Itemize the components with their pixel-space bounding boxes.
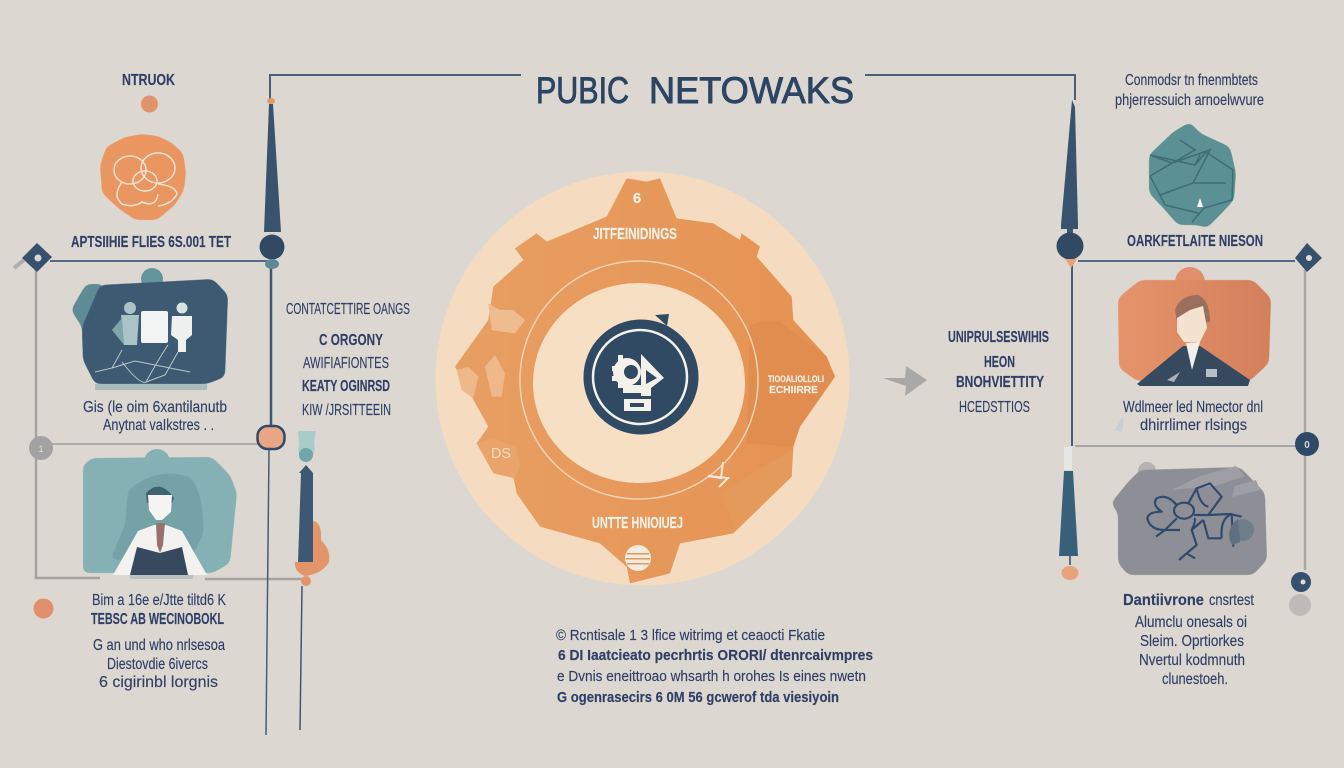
small pale marker [1115, 417, 1124, 432]
panel: navy people illustration [71, 268, 228, 390]
text: gray panel caption: Alumclu onesals oi [1135, 614, 1247, 631]
orange bullet [34, 598, 54, 618]
right label [768, 374, 824, 396]
icon: orange network blob [100, 134, 186, 220]
text: gray panel caption: Nvertul kodmnuth [1139, 652, 1245, 669]
title: PUBIC [536, 70, 629, 111]
text: middle left block: CONTATCETTIRE OANGS [286, 301, 410, 318]
text: middle left block: KEATY OGINRSD [302, 378, 390, 395]
top label: JITFEINIDINGS [593, 226, 677, 243]
text: navy panel caption: Anytnat vaIkstres . . [103, 417, 214, 434]
navy node right: 0 [1304, 440, 1310, 451]
text: bottom centre paragraph: e Dvnis eneittroao whsarth h orohes Is eines nwetn [557, 668, 866, 685]
bottom label: UNTTE HNIOIUEJ [592, 515, 683, 532]
icon: teal network blob [1149, 122, 1236, 228]
text: bottom centre paragraph: 6 DI Iaatcieato pecrhrtis ORORI/ dtenrcaivmpres [558, 647, 873, 664]
text: gray panel caption: Dantiivrone [1123, 592, 1204, 609]
lower right pin marker [1059, 447, 1078, 580]
text: orange panel caption [1123, 399, 1263, 434]
text: middle left block: C ORGONY [319, 332, 383, 349]
title [536, 70, 854, 111]
orange ragged ring [455, 178, 835, 583]
right heading: OARKFETLAITE NIESON [1127, 233, 1263, 250]
text: gray panel caption [1123, 592, 1254, 688]
text: navy panel caption [83, 399, 227, 434]
text: right of circle: BNOHVIETTITY [956, 374, 1044, 391]
text: top right block: phjerressuich arnoelwvure [1115, 92, 1264, 109]
text: bottom centre paragraph: G ogenrasecirs 6 0M 56 gcwerof tda viesiyoin [557, 689, 839, 706]
right label: TIOOALIOLLOLI [768, 374, 824, 384]
panel: teal person illustration [83, 449, 237, 579]
right connector lines [865, 75, 1305, 708]
right pin marker top [1056, 100, 1084, 268]
text: navy panel caption: Gis (le oim 6xantilanutb [83, 399, 227, 416]
decorative white arrow [708, 462, 728, 487]
left pin marker top [260, 98, 284, 269]
text: right of circle: HEON [984, 354, 1015, 371]
lower right nodes [1289, 572, 1311, 616]
text: orange panel caption: dhirrlimer rlsings [1140, 417, 1247, 434]
text: orange panel caption: Wdlmeer led Nmector dnl [1123, 399, 1263, 416]
gray node left [29, 436, 53, 460]
text: teal panel caption: TEBSC AB WECINOBOKL [91, 611, 224, 628]
text: teal panel caption: G an und who nrlsesoa [93, 637, 225, 654]
top marker: 6 [633, 190, 641, 207]
text: teal panel caption: 6 cigirinbl lorgnis [99, 674, 218, 691]
center icon badge [584, 314, 698, 434]
orange pill node [258, 426, 284, 449]
text: middle left block: AWIFIAFIONTES [303, 355, 389, 372]
text: bottom centre paragraph: © Rcntisale 1 3 lfice witrimg et ceaocti Fkatie [556, 627, 825, 644]
text: right of circle: UNIPRULSESWIHIS [948, 329, 1049, 346]
chart: central circular diagram [436, 172, 850, 586]
text: top right block [1115, 72, 1264, 109]
navy node right [1295, 432, 1319, 456]
text: gray panel caption: cnsrtest [1209, 592, 1254, 609]
text: gray panel caption: Sleim. Oprtiorkes [1140, 633, 1244, 650]
left heading 1: APTSIIHIE FLIES 6S.001 TET [71, 234, 231, 251]
white ring line [520, 261, 758, 499]
diamond node left [14, 243, 52, 272]
text: bottom centre paragraph [556, 627, 873, 706]
left connector lines [36, 75, 521, 735]
text: teal panel caption [91, 592, 226, 691]
panel: orange person illustration [1118, 267, 1271, 386]
title: NETOWAKS [649, 70, 854, 111]
text: right of circle [948, 329, 1049, 416]
text: teal panel caption: Diestovdie 6ivercs [107, 656, 208, 673]
text: gray panel caption: clunestoeh. [1162, 671, 1228, 688]
left squiggle icon: DS [491, 445, 511, 462]
orange dot [141, 96, 158, 112]
diamond node right [1295, 243, 1322, 272]
text: middle left block: KIW /JRSITTEEIN [302, 402, 391, 419]
text: teal panel caption: Bim a 16e e/Jtte tiltd6 K [92, 592, 226, 609]
network label: NTRUOK [122, 72, 175, 89]
panel: gray network illustration [1111, 462, 1267, 575]
right label: ECHIIRRE [769, 384, 818, 396]
text: top right block: Conmodsr tn fnenmbtets [1125, 72, 1258, 89]
lower left pin marker [295, 431, 329, 586]
arrow [883, 366, 927, 396]
pale centre [533, 283, 745, 483]
text: right of circle: HCEDSTTIOS [959, 399, 1030, 416]
text: middle left block [286, 301, 410, 419]
gray node left: 1 [38, 444, 44, 454]
outer pale disc [436, 172, 850, 586]
small stack icon [625, 545, 651, 571]
